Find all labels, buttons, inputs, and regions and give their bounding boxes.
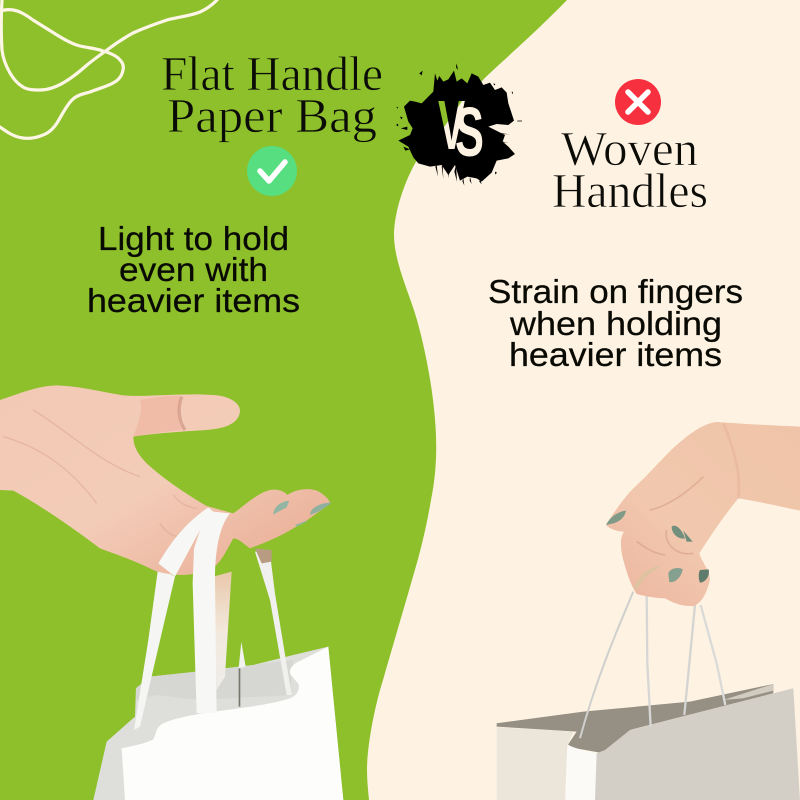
- illustration: left hand: [0, 385, 332, 713]
- title: Woven Handles: [552, 121, 708, 218]
- panel: green wavy left side: [0, 0, 567, 800]
- text block: left benefit: Light to hold: [98, 220, 289, 257]
- title: Flat Handle Paper Bag: Paper Bag: [167, 88, 377, 143]
- illustration: right paper bag with string handles: [497, 592, 800, 800]
- title: Flat Handle Paper Bag: [161, 46, 383, 143]
- title: Flat Handle Paper Bag: Flat Handle: [161, 46, 383, 101]
- text block: left benefit: heavier items: [87, 282, 300, 319]
- text block: right drawback: Strain on fingers: [488, 273, 743, 310]
- text block: left benefit: [87, 220, 300, 319]
- VS ink splat badge: [396, 63, 522, 186]
- VS ink splat badge: V: [438, 87, 465, 165]
- text block: left benefit: even with: [119, 251, 268, 288]
- icon: green check badge: [247, 146, 297, 196]
- text block: right drawback: [488, 273, 743, 373]
- text block: right drawback: when holding: [509, 305, 722, 342]
- icon: red cross badge: [615, 79, 661, 125]
- text block: right drawback: heavier items: [509, 336, 722, 373]
- VS ink splat badge: S: [455, 93, 484, 172]
- illustration: right hand: [606, 422, 800, 606]
- decorative squiggle line: [0, 0, 217, 138]
- title: Woven Handles: Handles: [552, 163, 708, 218]
- illustration: left white bag: [93, 548, 343, 800]
- left hand flat handle strap: [158, 507, 230, 713]
- title: Woven Handles: Woven: [561, 121, 698, 176]
